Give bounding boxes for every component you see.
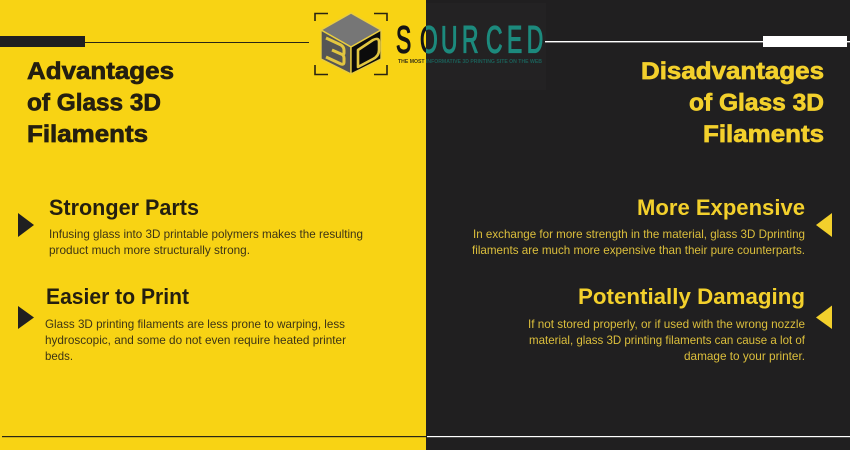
heading: advantages: of Glass 3D bbox=[27, 90, 161, 116]
bottom rule left bbox=[2, 436, 426, 437]
logo: 3D Sourced bbox=[315, 13, 543, 74]
item body: In exchange for more strength in the material, glass 3D Dprinting bbox=[473, 227, 805, 241]
bottom rule right bbox=[427, 436, 850, 437]
left header rule bbox=[0, 36, 309, 47]
icon: arrow easier to print bbox=[18, 306, 34, 329]
item body bbox=[45, 317, 346, 363]
heading: disadvantages: Filaments bbox=[703, 121, 824, 148]
item: potentially damaging bbox=[528, 284, 806, 363]
item body: Infusing glass into 3D printable polymers makes the resulting bbox=[49, 227, 363, 241]
item body bbox=[472, 227, 805, 257]
panel: advantages background bbox=[0, 0, 426, 450]
panel: disadvantages background bbox=[426, 0, 850, 450]
logo backing patch bbox=[426, 3, 546, 90]
item body: hydroscopic, and some do not even require heated printer bbox=[45, 333, 346, 347]
heading: disadvantages bbox=[641, 58, 824, 148]
item body: damage to your printer. bbox=[684, 349, 805, 363]
item heading: Easier to Print bbox=[46, 284, 190, 309]
heading: disadvantages: Disadvantages bbox=[641, 58, 824, 85]
item: easier to print bbox=[45, 284, 346, 363]
logo wordmark: SOURCED bbox=[396, 19, 543, 61]
right header rule bbox=[545, 36, 850, 47]
item body: material, glass 3D printing filaments can cause a lot of bbox=[529, 333, 806, 347]
item body bbox=[528, 317, 806, 363]
item body: If not stored properly, or if used with the wrong nozzle bbox=[528, 317, 805, 331]
logo tagline: THE MOST INFORMATIVE 3D PRINTING SITE ON THE WEB bbox=[398, 59, 542, 65]
icon: arrow more expensive bbox=[816, 213, 832, 237]
item: more expensive bbox=[472, 195, 805, 257]
item body: filaments are much more expensive than their pure counterparts. bbox=[472, 243, 805, 257]
heading: advantages: Advantages bbox=[27, 58, 174, 85]
item heading: Stronger Parts bbox=[49, 195, 199, 220]
item body: beds. bbox=[45, 349, 73, 363]
icon: arrow stronger parts bbox=[18, 213, 34, 237]
item heading: More Expensive bbox=[637, 195, 805, 220]
heading: advantages bbox=[27, 58, 174, 148]
item body: Glass 3D printing filaments are less prone to warping, less bbox=[45, 317, 345, 331]
icon: corner brackets bbox=[315, 14, 387, 74]
heading: advantages: Filaments bbox=[27, 121, 148, 148]
item body bbox=[49, 227, 363, 257]
icon: cube bbox=[321, 13, 381, 74]
heading: disadvantages: of Glass 3D bbox=[689, 90, 824, 116]
item: stronger parts bbox=[49, 195, 363, 257]
item body: product much more structurally strong. bbox=[49, 243, 250, 257]
icon: arrow potentially damaging bbox=[816, 306, 832, 329]
item heading: Potentially Damaging bbox=[578, 284, 805, 309]
